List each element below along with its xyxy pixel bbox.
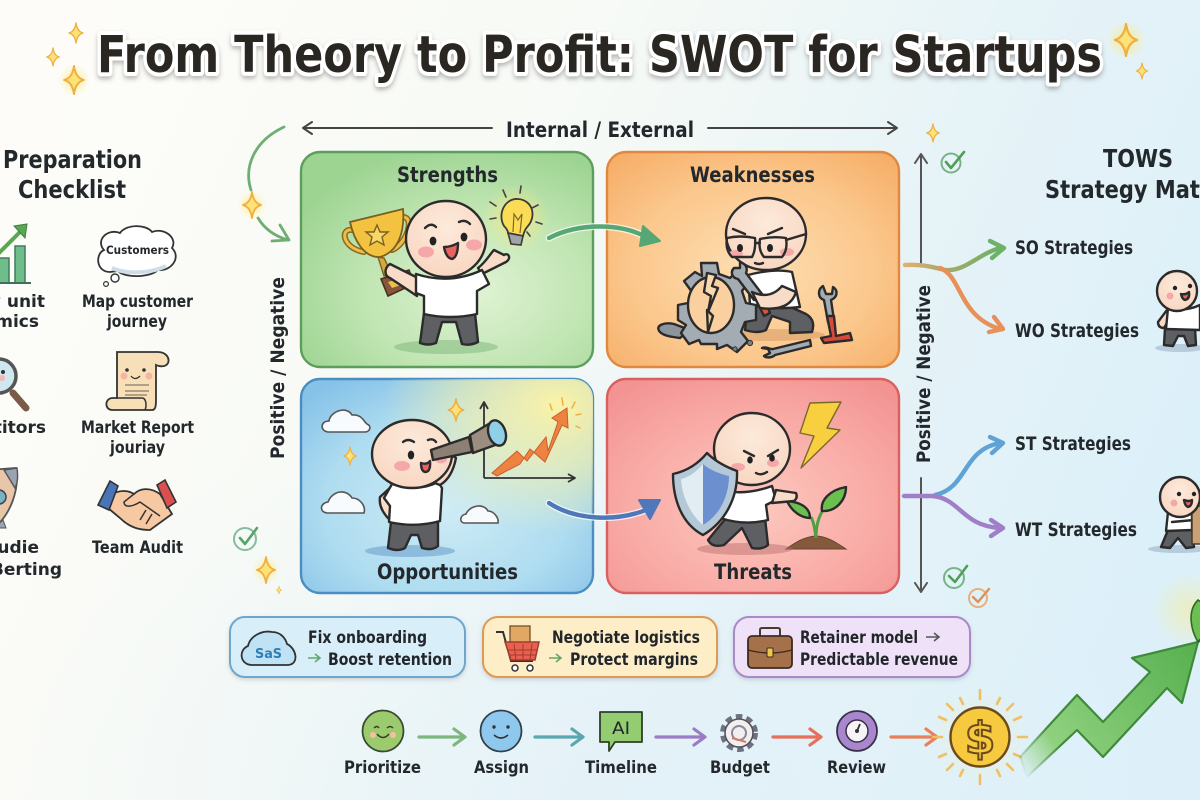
text: fix onboarding: Fix onboarding bbox=[308, 628, 427, 648]
axis label right: Positive / Negative bbox=[913, 285, 935, 463]
icon: trophy bbox=[345, 209, 414, 296]
icon: shield bbox=[673, 453, 737, 535]
text: negotiate logistics bbox=[549, 628, 700, 670]
sparkles: title left bbox=[47, 23, 90, 96]
panel: threats bbox=[607, 379, 899, 593]
chart: growth arrow bbox=[480, 398, 581, 482]
text: retainer model bbox=[800, 628, 958, 670]
heading: weaknesses: Weaknesses bbox=[690, 163, 815, 187]
text: retainer model: Predictable revenue bbox=[800, 650, 958, 670]
icon: broken gear bbox=[658, 263, 756, 352]
curved arrow: top left bbox=[237, 127, 289, 241]
step: timeline bbox=[585, 712, 657, 778]
checks and sparkles: lower left bbox=[234, 528, 282, 594]
icon: dollar coin bbox=[932, 689, 1028, 785]
step: assign: Assign bbox=[474, 758, 529, 778]
heading: threats: Threats bbox=[714, 560, 792, 584]
heading: opportunities: Opportunities bbox=[377, 560, 518, 584]
text: market report: jouriay bbox=[109, 438, 165, 458]
character: threats bbox=[697, 413, 797, 555]
sparkles: title right bbox=[1106, 20, 1148, 79]
panel: preparation checklist bbox=[0, 145, 194, 580]
step: budget bbox=[710, 718, 770, 778]
text: map customer journey: journey bbox=[106, 312, 167, 332]
step: review bbox=[827, 711, 886, 778]
icon: handshake bbox=[98, 480, 176, 530]
icon: sparkles bbox=[344, 399, 464, 465]
branch: so and wo bbox=[905, 241, 1004, 332]
text: market report: Market Report bbox=[81, 418, 194, 438]
step: review: Review bbox=[827, 758, 886, 778]
text: fix onboarding: Boost retention bbox=[328, 650, 452, 670]
arrow: step 1 bbox=[419, 729, 465, 745]
icon: rocket bbox=[0, 468, 18, 528]
checks and sparkles: right of matrix bbox=[927, 124, 989, 607]
panel: strengths bbox=[301, 152, 593, 367]
text: fix onboarding bbox=[308, 628, 452, 670]
icon: customers thought cloud bbox=[98, 226, 176, 286]
card: logistics bbox=[483, 617, 717, 677]
axis: internal / external bbox=[303, 118, 897, 142]
character: bottom right bbox=[1148, 477, 1200, 553]
arrow: opportunities to threats bbox=[549, 500, 660, 519]
panel: weaknesses bbox=[607, 152, 899, 367]
text: view unit economics bbox=[0, 292, 45, 332]
checklist heading: Preparation bbox=[3, 145, 142, 174]
branch: st and wt bbox=[904, 437, 1003, 536]
process steps bbox=[344, 710, 937, 778]
arrow: step 4 bbox=[773, 729, 821, 745]
icon: lightning bbox=[800, 402, 841, 468]
text: wo strategies: WO Strategies bbox=[1015, 320, 1139, 342]
panel: opportunities bbox=[301, 379, 593, 593]
step: assign bbox=[474, 710, 529, 778]
text: so strategies: SO Strategies bbox=[1015, 237, 1133, 259]
icon: scroll report bbox=[106, 352, 169, 410]
icon: arrow leaves bbox=[1191, 600, 1200, 642]
axis: right positive / negative bbox=[913, 154, 935, 592]
character: opportunities bbox=[365, 418, 509, 557]
axis label: Internal / External bbox=[506, 118, 694, 142]
step: timeline: AI bbox=[612, 719, 630, 739]
axis label: positive / negative left: Positive / Negative bbox=[267, 277, 289, 459]
character: top right bbox=[1155, 271, 1200, 352]
tows heading bbox=[1045, 144, 1200, 204]
text: retainer model: Retainer model bbox=[800, 628, 918, 648]
icon: cart bbox=[496, 626, 539, 671]
icon: customers thought cloud: Customers bbox=[106, 243, 169, 257]
tows heading: TOWS bbox=[1103, 144, 1173, 173]
panel: tows strategy matrix bbox=[904, 144, 1200, 553]
text: negotiate logistics: Protect margins bbox=[570, 650, 698, 670]
arrow: strengths to weaknesses bbox=[549, 226, 660, 246]
text: negotiate logistics: Negotiate logistics bbox=[552, 628, 700, 648]
icon: wrench red bbox=[819, 286, 852, 343]
icon: saas cloud bbox=[242, 632, 295, 665]
icon: wrench in hand bbox=[732, 262, 796, 316]
arrow: step 2 bbox=[535, 729, 583, 745]
arrow: step 3 bbox=[656, 729, 705, 745]
text: market report bbox=[81, 418, 194, 458]
icon: spanner on floor bbox=[733, 340, 811, 357]
step: timeline: Timeline bbox=[585, 758, 657, 778]
text: team audit: Team Audit bbox=[92, 538, 183, 558]
icon: dollar coin: $ bbox=[965, 713, 995, 764]
icon: growth chart bbox=[0, 224, 31, 283]
icon: briefcase bbox=[748, 628, 792, 668]
character: weaknesses bbox=[715, 198, 825, 341]
text: map customer journey: Map customer bbox=[82, 292, 193, 312]
text: wt strategies: WT Strategies bbox=[1015, 519, 1137, 541]
character: strengths bbox=[386, 201, 509, 354]
step: prioritize: Prioritize bbox=[344, 758, 421, 778]
icon: plant sprout bbox=[786, 487, 846, 549]
card: saas bbox=[230, 617, 465, 677]
text: st strategies: ST Strategies bbox=[1015, 433, 1131, 455]
growth arrow bbox=[1020, 572, 1200, 777]
step: budget: Budget bbox=[710, 758, 770, 778]
step: prioritize bbox=[344, 710, 421, 778]
text: audience targeting bbox=[0, 538, 62, 580]
heading: strengths: Strengths bbox=[397, 163, 498, 187]
checklist heading bbox=[3, 145, 142, 204]
text: map customer journey bbox=[82, 292, 193, 332]
arrow: step 5 bbox=[891, 729, 937, 745]
icon: magnifier bbox=[0, 359, 26, 408]
card: retainer bbox=[734, 617, 970, 677]
icon: saas cloud: SaS bbox=[255, 647, 282, 662]
checklist heading: Checklist bbox=[18, 175, 126, 204]
icon: clouds bbox=[321, 410, 498, 523]
icon: light bulb bbox=[482, 184, 550, 252]
